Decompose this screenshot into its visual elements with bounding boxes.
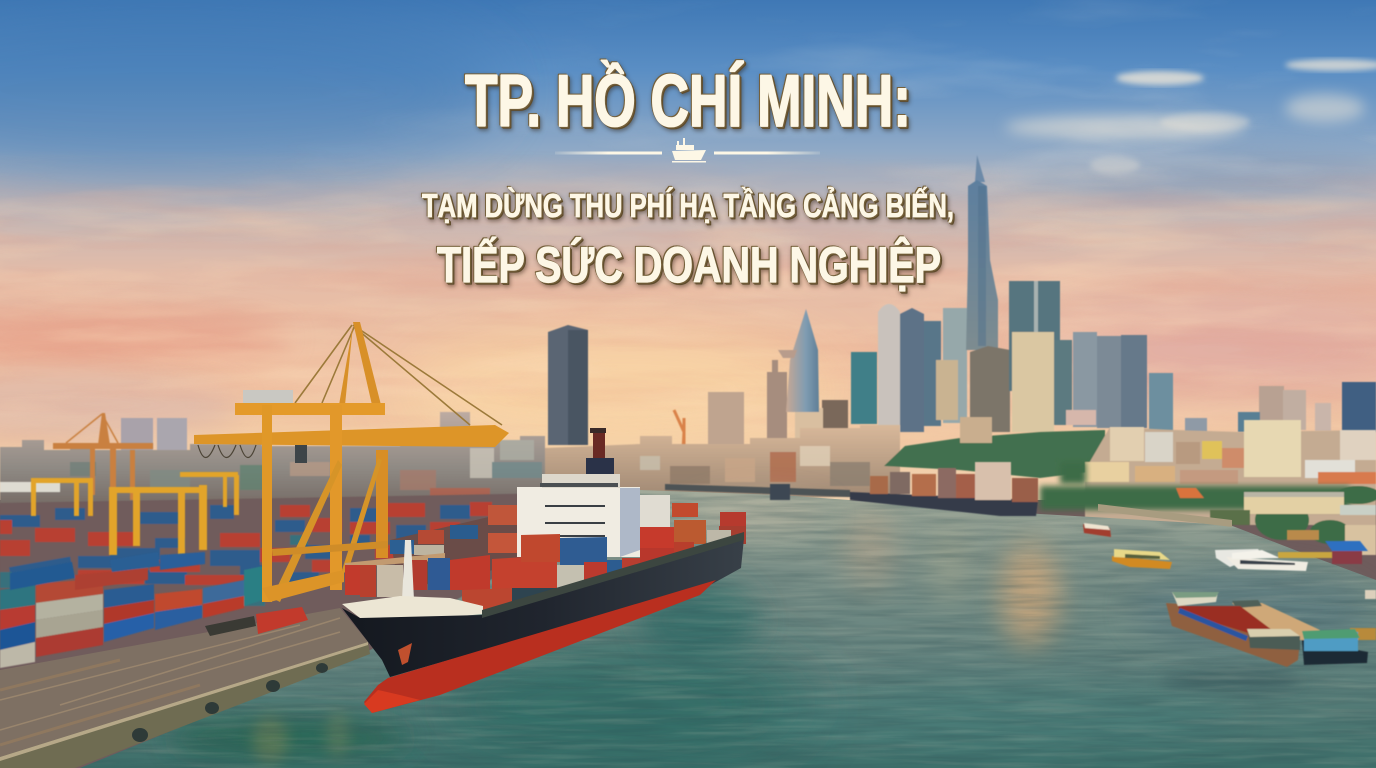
river boats	[1083, 523, 1376, 667]
far right towers	[1185, 382, 1376, 432]
port crane distant	[674, 410, 684, 468]
boot topping red	[364, 580, 716, 713]
subtitle: line two: TIẾP SỨC DOANH NGHIỆP	[437, 237, 941, 293]
foreground container stacks	[0, 552, 263, 668]
forward mast	[402, 540, 414, 600]
row behind stacks	[10, 562, 75, 590]
boat: red ferry	[1083, 523, 1111, 537]
tree hill	[884, 430, 1105, 478]
container ship	[342, 428, 746, 713]
river bank edge	[1098, 504, 1232, 527]
legs	[262, 405, 272, 602]
stack 3	[104, 584, 154, 642]
mid-rise apartment block	[1244, 420, 1301, 477]
upper portal beam	[235, 403, 385, 415]
quay wall	[0, 642, 370, 768]
title block	[422, 61, 954, 293]
city low-rise band	[0, 412, 1376, 555]
sand barge	[1232, 600, 1320, 640]
hull black	[342, 538, 744, 677]
boat: white cruisers	[1215, 549, 1308, 571]
gantry: yellow far left	[31, 478, 93, 516]
left distant towers	[121, 418, 187, 458]
stack 1	[0, 585, 35, 668]
hoist cables	[198, 445, 256, 458]
deck edge	[482, 532, 744, 618]
background gantry cranes	[31, 413, 239, 555]
apex mast	[353, 322, 381, 405]
twin towers	[1009, 281, 1072, 432]
base tower under Landmark	[970, 346, 1010, 432]
title: main: TP. HỒ CHÍ MINH:	[465, 61, 911, 142]
river water	[0, 490, 1376, 768]
Landmark 81 tower	[966, 155, 998, 350]
gantry: yellow right	[180, 472, 239, 515]
boat: yellow ferry	[1112, 549, 1172, 569]
funnel	[586, 428, 614, 474]
Bitexco tower	[778, 309, 819, 412]
stack 5	[203, 566, 263, 618]
stack 4	[155, 589, 202, 630]
superstructure	[517, 474, 670, 557]
blue cabin boat	[1302, 629, 1368, 665]
clouds: upper right	[1005, 59, 1376, 174]
right bank city	[1085, 427, 1376, 525]
teal tower	[851, 352, 877, 424]
stack 2	[36, 578, 103, 657]
hazy left city	[0, 412, 545, 505]
anchor	[398, 643, 412, 665]
central cluster	[878, 304, 967, 432]
ship cargo mid background	[390, 505, 540, 590]
forecastle deck	[342, 596, 483, 620]
boom	[194, 425, 509, 447]
icon: ship	[672, 138, 706, 162]
hazy centre city	[545, 425, 900, 505]
divider with ship icon	[555, 138, 820, 162]
container yard: background rows	[0, 493, 640, 690]
mid left buildings	[767, 360, 848, 450]
jetty with blue roof	[1278, 530, 1376, 640]
machine house	[243, 390, 293, 406]
gantry: yellow centre	[109, 485, 207, 555]
far tower	[708, 392, 744, 447]
midship containers	[345, 534, 640, 614]
main crane	[194, 322, 509, 602]
trees right bank	[1040, 462, 1376, 544]
quay / pier surface	[0, 608, 370, 768]
right cluster	[1066, 332, 1173, 431]
skyline	[121, 155, 1376, 468]
distant moored ship	[665, 462, 1038, 516]
cables	[295, 325, 502, 425]
stern containers	[640, 503, 746, 564]
crane: far left	[53, 413, 153, 523]
subtitle: line one: TẠM DỪNG THU PHÍ HẠ TẦNG CẢNG BIẾN,	[422, 187, 954, 224]
lower beam	[262, 570, 344, 602]
tower: left of ship	[548, 325, 588, 445]
cargo barge	[1166, 592, 1300, 667]
truck on quay	[205, 607, 308, 636]
sky background	[0, 0, 1376, 500]
